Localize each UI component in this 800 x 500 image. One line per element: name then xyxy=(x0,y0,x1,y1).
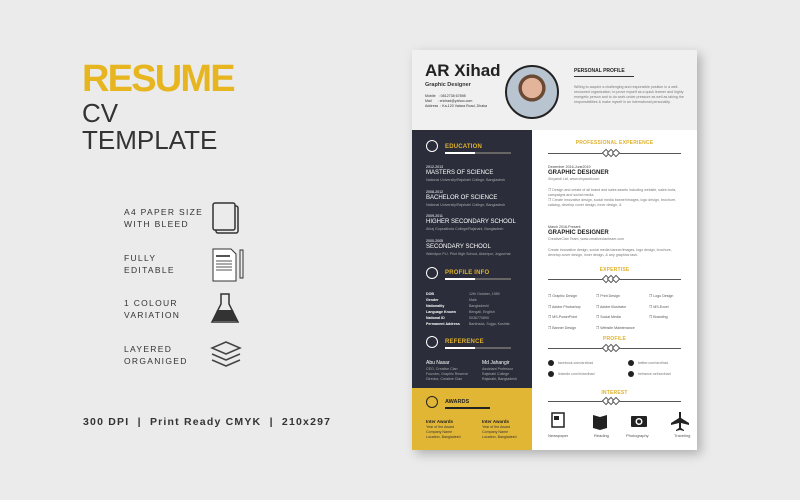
right column: facebook.com/arxihad xyxy=(558,361,593,365)
header xyxy=(412,50,697,130)
sidebar: Rajshahi, Bangladesh xyxy=(482,377,517,381)
right column: twitter.com/arxihad xyxy=(638,361,668,365)
right column: ❐ Adobe Illustrator xyxy=(596,304,626,308)
name: AR Xihad xyxy=(425,61,501,80)
right column: ❐ MS-PowerPoint xyxy=(548,315,577,319)
feature: colour: 1 COLOUR xyxy=(124,298,178,308)
right column: ❐ Print Design xyxy=(596,294,620,298)
sidebar: CEO, Creative Clan xyxy=(426,367,458,371)
right column: March 2016-Present xyxy=(548,225,581,229)
awards xyxy=(412,388,532,450)
sidebar: DOB xyxy=(426,292,434,296)
education xyxy=(426,140,438,152)
sidebar: Md Jahangir xyxy=(482,360,510,366)
sidebar: 2012-2013 xyxy=(426,165,443,169)
sidebar: EDUCATION xyxy=(445,144,482,150)
right column: December 2016-June2019 xyxy=(548,165,591,169)
right column: CreativeClan Team, www.creativeclanteam.com xyxy=(548,237,624,241)
awards: Inter Awards xyxy=(426,419,453,424)
right column: ❐ MS-Excel xyxy=(649,304,669,308)
right column: ❐ Create innovative design, social media banner/images, logo design, brochure, catalog, develop cover design, inner design, & xyxy=(548,198,676,207)
icon: layers xyxy=(210,341,242,367)
sidebar: 2000-2005 xyxy=(426,239,443,243)
sidebar: 12th October, 1989 xyxy=(469,292,500,296)
photo xyxy=(505,65,559,119)
awards: Year of the Award xyxy=(482,425,510,429)
interest icons: Newspaper xyxy=(548,433,569,438)
awards: Location, Bangladesh xyxy=(426,435,461,439)
sidebar: Bangladeshi xyxy=(469,304,489,308)
right column: ❐ Design and create of all brand and sales assets including website, sales tools, campaigns and social media. xyxy=(548,188,676,197)
interest icons: Reading xyxy=(594,433,609,438)
right column: ❐ Website Maintenance xyxy=(596,326,635,330)
interest icons: Traveling xyxy=(674,433,690,438)
feature: editable: FULLY xyxy=(124,253,156,263)
right column: ❐ Graphic Design xyxy=(548,294,577,298)
right column: Create innovative design, social media banner/images, logo design, brochure, develop cover design, inner design, & any graphics task. xyxy=(548,248,672,257)
awards: AWARDS xyxy=(445,399,469,405)
right column: Xinyandi Ltd, www.xinyandi.com xyxy=(548,177,599,181)
sidebar: Assistant Professor xyxy=(482,367,513,371)
sidebar: Abu Nasar xyxy=(426,360,450,366)
sidebar: Barkhada, Sujga, Kushtia xyxy=(469,322,510,326)
profile info xyxy=(426,267,438,279)
right column xyxy=(548,140,690,438)
icon: document and pen xyxy=(212,248,244,282)
feature: A4 paper: WITH BLEED xyxy=(124,219,189,229)
sidebar: PROFILE INFO xyxy=(445,270,489,276)
awards: Company Name xyxy=(426,430,452,434)
right column: ❐ Adobe Photoshop xyxy=(548,304,581,308)
feature: colour: VARIATION xyxy=(124,310,180,320)
right column: GRAPHIC DESIGNER xyxy=(548,230,609,236)
sidebar: Nationality xyxy=(426,304,444,308)
interest: INTEREST xyxy=(601,390,628,396)
sidebar xyxy=(412,130,532,388)
professional experience: PROFESSIONAL EXPERIENCE xyxy=(576,140,653,146)
awards: Inter Awards xyxy=(482,419,509,424)
personal profile: PERSONAL PROFILE xyxy=(574,68,625,74)
reference xyxy=(426,336,438,348)
feature: layered: LAYERED xyxy=(124,344,172,354)
feature: editable xyxy=(124,253,175,275)
header: Mail : xrichad@yahoo.com xyxy=(425,99,472,103)
sidebar: National University/Rajshahi College, Bangladesh xyxy=(426,203,505,207)
sidebar: Alhaj Gupsakhola College/Rajshahi, Bangladesh xyxy=(426,227,503,231)
awards: Location, Bangladesh xyxy=(482,435,517,439)
sidebar: Male xyxy=(469,298,477,302)
subtitle: CV TEMPLATE xyxy=(82,98,217,155)
sidebar: HIGHER SECONDARY SCHOOL xyxy=(426,219,516,225)
sidebar: Gender xyxy=(426,298,439,302)
sidebar: Rajshahi College xyxy=(482,372,509,376)
sidebar: Wahidpur P.U. Pilot High School, Akkelpur, Joypurhat xyxy=(426,252,510,256)
feature: layered xyxy=(124,344,188,366)
right column: behance.net/arxihad xyxy=(638,372,671,376)
right column: linkedin.com/in/arxihad xyxy=(558,372,595,376)
awards: Year of the Award xyxy=(426,425,454,429)
right column: GRAPHIC DESIGNER xyxy=(548,170,609,176)
feature: A4 paper: A4 PAPER SIZE xyxy=(124,207,203,217)
feature: editable: EDITABLE xyxy=(124,265,175,275)
header: Mobile : 0812738 67898 xyxy=(425,94,466,98)
feature: colour xyxy=(124,298,180,320)
feature: A4 paper xyxy=(124,207,203,229)
icon: flask xyxy=(210,293,240,323)
right column: ❐ Logo Design xyxy=(649,294,673,298)
sidebar: Founder, Graphic Reserve xyxy=(426,372,468,376)
awards: Company Name xyxy=(482,430,508,434)
interest icons xyxy=(548,412,690,438)
sidebar: BACHELOR OF SCIENCE xyxy=(426,195,497,201)
header: Address : Ka-120 Vatara Road, Dhaka xyxy=(425,104,487,108)
right column: ❐ Branding xyxy=(649,315,668,319)
interest icons: Photography xyxy=(626,433,649,438)
subtitle: CV TEMPLATE: CV xyxy=(82,98,118,128)
title: RESUME: RESUME xyxy=(82,58,234,100)
feature: layered: ORGANIGED xyxy=(124,356,188,366)
profile social: PROFILE xyxy=(603,336,626,342)
sidebar: Permanent Address xyxy=(426,322,460,326)
expertise: EXPERTISE xyxy=(600,267,629,273)
sidebar: 2009-2011 xyxy=(426,214,443,218)
sidebar: National ID xyxy=(426,316,445,320)
sidebar: Director, Creative Clan xyxy=(426,377,462,381)
sidebar: 5036770890 xyxy=(469,316,489,320)
resume document xyxy=(412,50,697,450)
sidebar: Bengali, English xyxy=(469,310,495,314)
sidebar: 2008-2012 xyxy=(426,190,443,194)
footer spec line: 300 DPI | Print Ready CMYK | 210x297 xyxy=(83,416,331,428)
sidebar: REFERENCE xyxy=(445,339,484,345)
right column: ❐ Banner Design xyxy=(548,326,576,330)
subtitle: CV TEMPLATE: TEMPLATE xyxy=(82,125,217,155)
sidebar: SECONDARY SCHOOL xyxy=(426,244,491,250)
icon: paper xyxy=(212,202,239,234)
header: Graphic Designer xyxy=(425,82,471,88)
right column: ❐ Social Media xyxy=(596,315,621,319)
sidebar: National University/Rajshahi College, Bangladesh xyxy=(426,178,505,182)
header: Willing to acquire a challenging and responsible position in a well-renowned organization, to prove myself as a quick learner and highly energetic person and to do work under pressure as well as taking the responsibilities & make myself in an international personality. xyxy=(574,85,684,104)
sidebar: Language Known xyxy=(426,310,456,314)
sidebar: MASTERS OF SCIENCE xyxy=(426,170,493,176)
